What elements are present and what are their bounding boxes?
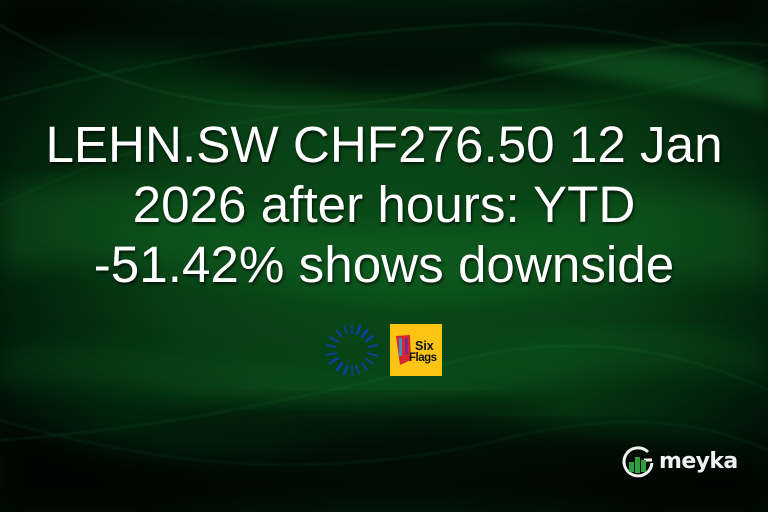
icon: meyka gauge (622, 446, 654, 478)
title: -51.42% shows downside (94, 236, 674, 293)
logo: meyka (622, 446, 738, 478)
icon: Six Flags logo (390, 324, 442, 376)
title: 2026 after hours: YTD (133, 176, 635, 233)
icon: blue radial spinner logo (326, 324, 378, 376)
icon: Six Flags logo: Flags (409, 352, 437, 364)
wordmark: meyka (659, 449, 738, 474)
title: LEHN.SW CHF276.50 12 Jan (45, 116, 723, 173)
icon: Six Flags logo: Six (415, 339, 434, 353)
lighter green bands (0, 183, 768, 300)
